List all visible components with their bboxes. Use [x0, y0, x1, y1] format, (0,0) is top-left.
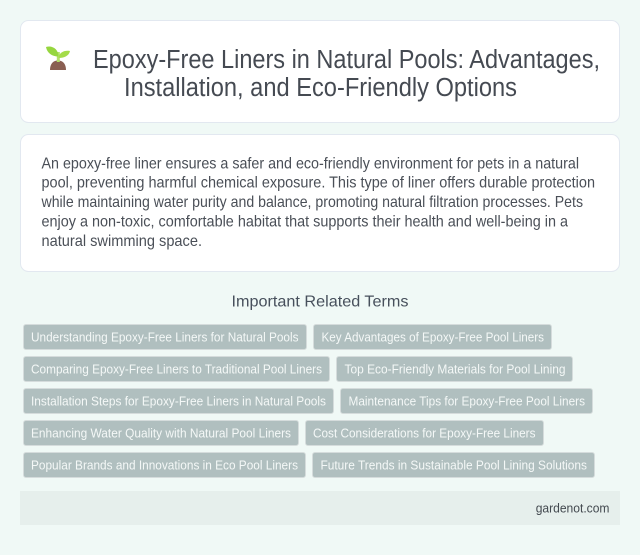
text block: description [41, 155, 595, 250]
tag list [24, 324, 594, 478]
tag [24, 324, 306, 350]
title: Installation, and Eco-Friendly Options [124, 74, 517, 102]
footer [20, 491, 620, 525]
tag: Future Trends in Sustainable Pool Lining Solutions [320, 458, 587, 472]
tag: Popular Brands and Innovations in Eco Pool Liners [31, 458, 298, 472]
text block: description: enjoy a non-toxic, comfortable habitat that supports their health and well-being in a [42, 214, 568, 231]
tag [24, 452, 306, 478]
tag [340, 388, 592, 414]
tag: Key Advantages of Epoxy-Free Pool Liners [322, 330, 544, 344]
tag: Understanding Epoxy-Free Liners for Natural Pools [31, 330, 299, 344]
footer source: gardenot.com [536, 500, 610, 515]
text block: description: An epoxy-free liner ensures a safer and eco-friendly environment for pets in a natural [42, 155, 579, 172]
text block: description: while maintaining water purity and balance, promoting natural filtration processes. Pets [41, 194, 583, 211]
tag: Installation Steps for Epoxy-Free Liners in Natural Pools [31, 394, 326, 408]
title [93, 46, 600, 102]
tag [336, 356, 572, 382]
tag: Enhancing Water Quality with Natural Pool Liners [31, 426, 291, 440]
text block: description: pool, preventing harmful chemical exposure. This type of liner offers durable protection [42, 175, 595, 192]
tag [314, 324, 552, 350]
tag [24, 356, 330, 382]
tag [24, 420, 298, 446]
text block: description: natural swimming space. [42, 233, 202, 250]
tag [312, 452, 594, 478]
tag: Comparing Epoxy-Free Liners to Traditional Pool Liners [31, 362, 322, 376]
tag: Cost Considerations for Epoxy-Free Liners [313, 426, 536, 440]
tag [306, 420, 544, 446]
heading: related terms: Important Related Terms [232, 294, 408, 310]
tag: Top Eco-Friendly Materials for Pool Lining [344, 362, 566, 376]
title: Epoxy-Free Liners in Natural Pools: Advantages, [93, 46, 600, 74]
panel: header [20, 20, 620, 122]
panel: description [20, 134, 620, 272]
tag [24, 388, 334, 414]
tag: Maintenance Tips for Epoxy-Free Pool Liners [348, 394, 585, 408]
icon: seedling [46, 46, 70, 70]
